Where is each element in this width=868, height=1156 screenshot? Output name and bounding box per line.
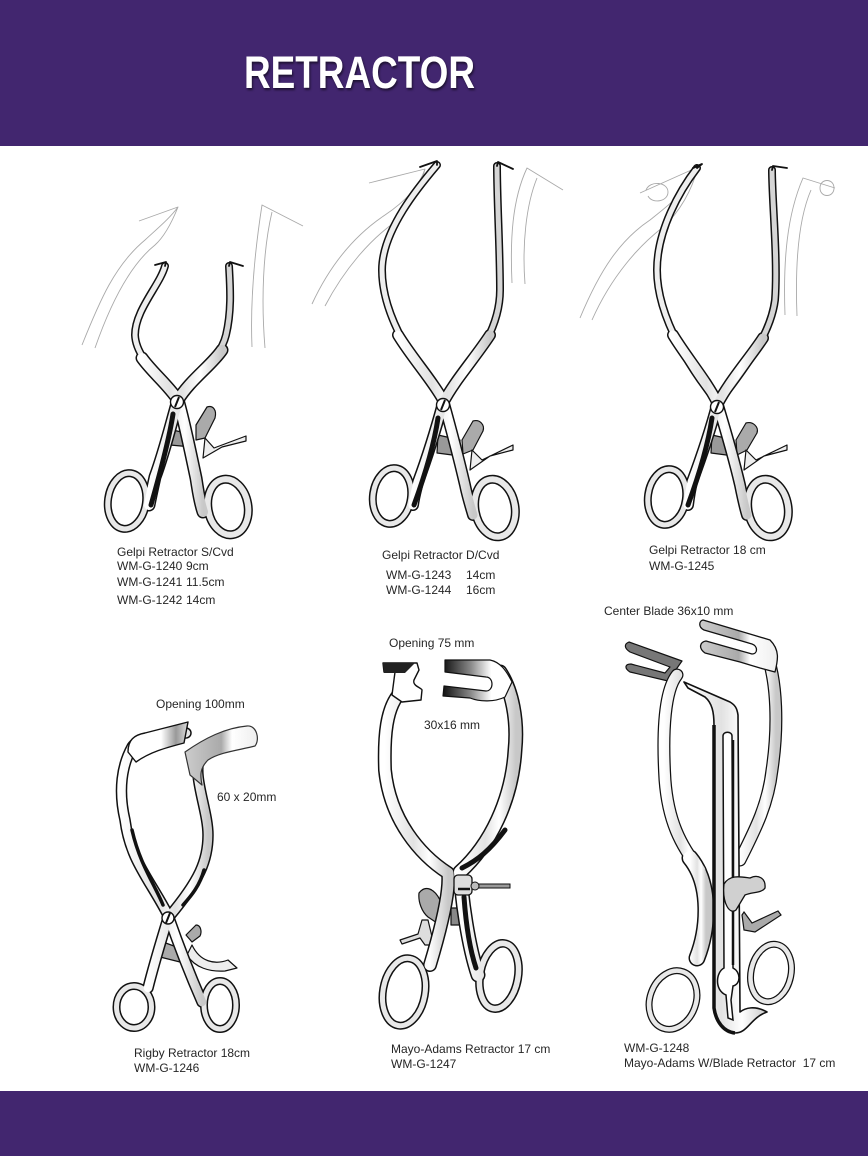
label: center blade: Center Blade 36x10 mm: [604, 604, 733, 618]
ghost outline: left hook with loop: [580, 167, 698, 320]
label: Gelpi S/Cvd: Gelpi Retractor S/Cvd: [117, 545, 234, 559]
right blade: [185, 726, 257, 785]
ghost outline: left hook: [82, 207, 178, 348]
title: RETRACTOR: [244, 47, 475, 98]
label: Mayo-Adams with blade: WM-G-1248: [624, 1041, 690, 1055]
label: blade 60 x 20mm: 60 x 20mm: [217, 790, 276, 804]
ratchet wing: [419, 889, 440, 925]
right blade tines: [700, 620, 777, 672]
label: Gelpi D/Cvd: WM-G-1244: [386, 583, 452, 597]
ratchet wing: [186, 925, 201, 942]
dark shading stripe: [688, 418, 712, 505]
right arm and ring: [740, 650, 797, 1006]
dark shading stripe: [132, 830, 204, 905]
label: Gelpi S/Cvd: 9cm: [186, 559, 209, 573]
label: opening 100mm: Opening 100mm: [156, 697, 245, 711]
label: Gelpi S/Cvd: 11.5cm: [186, 575, 224, 589]
instrument: Mayo-Adams with center blade: [625, 620, 797, 1036]
label: Rigby: Rigby Retractor 18cm: [134, 1046, 250, 1060]
ratchet lever: [742, 911, 781, 932]
label: Rigby: [134, 1046, 250, 1075]
label: Gelpi D/Cvd: Gelpi Retractor D/Cvd: [382, 548, 499, 562]
pivot screw: [436, 398, 450, 412]
handles, arms and finger rings: [644, 168, 793, 540]
left blade tines: [625, 642, 682, 681]
instrument: Gelpi retractor S/Cvd: [82, 205, 303, 538]
ratchet wing: [462, 421, 483, 454]
label: Gelpi D/Cvd: WM-G-1243: [386, 568, 452, 582]
thumb lever: [400, 920, 434, 945]
wing nut: [724, 876, 765, 911]
dark shading stripe: [462, 830, 505, 968]
label: Mayo-Adams: [391, 1042, 550, 1071]
bottom banner: [0, 1091, 868, 1156]
thumb lever: [470, 445, 513, 470]
label: Gelpi 18 cm: Gelpi Retractor 18 cm: [649, 543, 766, 557]
instrument: Rigby retractor: [116, 722, 257, 1029]
left blade: [128, 722, 188, 762]
label: Gelpi D/Cvd: 14cm: [466, 568, 495, 582]
ratchet wing: [196, 407, 216, 440]
ratchet bar: [437, 435, 460, 456]
label: Gelpi D/Cvd: [382, 548, 499, 597]
ratchet bar: [711, 435, 734, 456]
thumb lever: [187, 945, 237, 971]
hook tips: [693, 164, 787, 170]
instrument: Gelpi retractor 18 cm: [580, 164, 835, 540]
screw and bar: [454, 875, 510, 895]
label: Gelpi S/Cvd: 14cm: [186, 593, 215, 607]
ratchet bar: [160, 942, 182, 962]
handles, arms and finger rings: [104, 266, 253, 538]
handles, arms and finger rings: [369, 165, 520, 540]
thumb lever: [203, 436, 246, 458]
label: Gelpi S/Cvd: WM-G-1240: [117, 559, 183, 573]
instrument: Mayo-Adams retractor: [377, 660, 523, 1029]
right jaw: [443, 660, 512, 701]
label: Gelpi S/Cvd: WM-G-1242: [117, 593, 183, 607]
dark shading stripe: [151, 414, 173, 505]
hook tips: [155, 262, 243, 266]
label: Mayo-Adams: Mayo-Adams Retractor 17 cm: [391, 1042, 550, 1056]
instrument: Gelpi retractor D/Cvd: [312, 161, 563, 540]
label: Gelpi S/Cvd: WM-G-1241: [117, 575, 183, 589]
label: Mayo-Adams: WM-G-1247: [391, 1057, 457, 1071]
thumb lever: [744, 445, 787, 470]
ratchet bar: [170, 430, 192, 447]
label: blade 30x16 mm: 30x16 mm: [424, 718, 480, 732]
pivot screw: [710, 400, 724, 414]
left arm and ring: [641, 675, 706, 1036]
ghost outline: right hook: [252, 205, 303, 348]
pivot screw: [162, 912, 174, 924]
left jaw: [383, 663, 422, 702]
arms and finger rings: [377, 672, 523, 1029]
label: Rigby: WM-G-1246: [134, 1061, 200, 1075]
pivot screw: [170, 396, 184, 408]
label: Gelpi 18 cm: [649, 543, 766, 573]
top banner: [0, 0, 868, 146]
label: Gelpi 18 cm: WM-G-1245: [649, 559, 715, 573]
label: opening 75 mm: Opening 75 mm: [389, 636, 474, 650]
ghost outline: left hook: [312, 169, 425, 306]
dark shading stripe: [414, 418, 438, 505]
ratchet bar: [451, 908, 462, 925]
label: Mayo-Adams with blade: [624, 1041, 835, 1070]
left blade shade: [383, 663, 415, 673]
ghost outline: right hook: [511, 168, 563, 284]
label: Mayo-Adams with blade: Mayo-Adams W/Blade Retractor 17 cm: [624, 1056, 835, 1070]
center blade: [684, 682, 767, 1033]
label: Gelpi D/Cvd: 16cm: [466, 583, 495, 597]
label: Gelpi S/Cvd: [117, 545, 234, 607]
arms and finger rings: [116, 733, 236, 1029]
ratchet wing: [736, 423, 757, 455]
hook tips: [420, 161, 513, 169]
ghost outline: right hook with loop: [785, 178, 835, 316]
